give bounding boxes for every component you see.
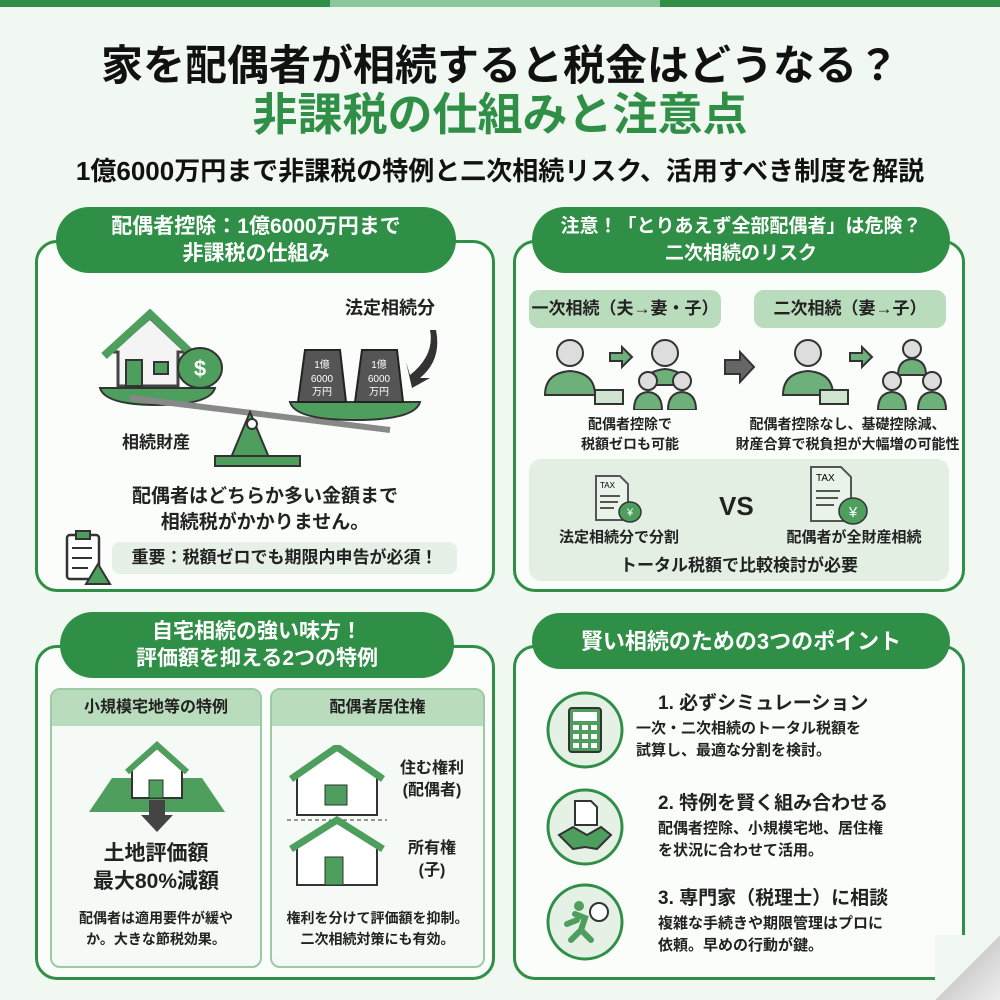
text: VS: VS bbox=[719, 491, 754, 521]
label: 相続財産: 相続財産 bbox=[122, 433, 190, 452]
icon: balance scale: 万円 bbox=[312, 387, 332, 398]
icon: handshake bbox=[546, 788, 624, 866]
label: first inheritance bbox=[529, 290, 721, 328]
icon: balance scale: 6000 bbox=[311, 374, 334, 385]
point 3: 依頼。早めの行動が鍵。 bbox=[658, 937, 823, 954]
text: note bbox=[79, 910, 233, 947]
icon: tax doc large: ¥ bbox=[848, 504, 858, 521]
subpanel header bbox=[52, 690, 260, 726]
text: first note: 配偶者控除で bbox=[588, 416, 672, 432]
panel3 header: 評価額を抑える2つの特例 bbox=[136, 647, 378, 670]
icon: balance scale: 6000 bbox=[368, 374, 391, 385]
label: first inheritance: 一次相続（夫→妻・子） bbox=[532, 299, 718, 318]
page curl bbox=[935, 935, 1000, 1000]
panel3 header bbox=[60, 612, 454, 678]
label: ownership bbox=[408, 839, 456, 879]
icon: tax doc large: TAX bbox=[816, 473, 835, 484]
icon column circles bbox=[546, 692, 624, 960]
label: 法定相続分: 法定相続分 bbox=[345, 298, 435, 318]
point 1: 一次・二次相続のトータル税額を bbox=[636, 720, 861, 737]
panel1 header: 非課税の仕組み bbox=[182, 242, 330, 265]
icon: balance scale bbox=[98, 308, 438, 467]
text: panel1 explanation: 配偶者はどちらか多い金額まで bbox=[132, 486, 398, 507]
panel: spouse deduction bbox=[35, 240, 495, 592]
text: compare total: トータル税額で比較検討が必要 bbox=[620, 556, 858, 575]
text: note: か。大きな節税効果。 bbox=[86, 931, 226, 947]
text: panel1 explanation bbox=[132, 486, 398, 533]
panel: second inheritance risk bbox=[513, 240, 965, 592]
subheading: 1億6000万円まで非課税の特例と二次相続リスク、活用すべき制度を解説 bbox=[76, 156, 924, 186]
panel4 header bbox=[532, 613, 950, 669]
point 2 bbox=[658, 792, 888, 859]
icon: split house bbox=[287, 745, 387, 886]
icon: tax doc large bbox=[810, 466, 868, 525]
icon: tax doc small: TAX bbox=[600, 481, 616, 490]
text: note bbox=[286, 910, 468, 947]
text: note: 配偶者は適用要件が緩や bbox=[79, 910, 233, 926]
text: 80% reduction: 土地評価額 bbox=[104, 842, 208, 865]
title: 家を配偶者が相続すると税金はどうなる？ bbox=[101, 42, 899, 89]
subpanel: small land bbox=[50, 688, 262, 968]
panel2 header: 二次相続のリスク bbox=[665, 243, 817, 264]
panel: two special rules bbox=[35, 645, 495, 980]
label: ownership: (子) bbox=[419, 862, 445, 879]
text: panel1 explanation: 相続税がかかりません。 bbox=[161, 512, 369, 533]
panel4 header: 賢い相続のための3つのポイント bbox=[581, 628, 901, 654]
icon: people flows bbox=[544, 339, 947, 410]
text: second note: 財産合算で税負担が大幅増の可能性 bbox=[736, 436, 960, 452]
subpanel header: 小規模宅地等の特例 bbox=[84, 699, 228, 716]
label: ownership: 所有権 bbox=[408, 840, 456, 857]
point 1: 1. 必ずシミュレーション bbox=[658, 693, 868, 714]
icon: house on land bbox=[89, 741, 225, 832]
panel1 header: 配偶者控除：1億6000万円まで bbox=[111, 215, 401, 238]
point 2: 2. 特例を賢く組み合わせる bbox=[658, 793, 888, 814]
text: 80% reduction: 最大80%減額 bbox=[93, 870, 219, 893]
panel1 header bbox=[56, 207, 456, 273]
point 1 bbox=[636, 692, 868, 759]
text: first note bbox=[581, 416, 679, 452]
callout: important bbox=[112, 542, 457, 574]
icon: balance scale: 万円 bbox=[369, 387, 389, 398]
text: second note: 配偶者控除なし、基礎控除減、 bbox=[750, 416, 946, 432]
subpanel: spouse residence right bbox=[270, 688, 485, 968]
label: all to spouse: 配偶者が全財産相続 bbox=[786, 529, 922, 546]
icon: tax doc small: ¥ bbox=[626, 507, 634, 519]
subpanel header: 配偶者居住権 bbox=[329, 699, 426, 716]
label: second inheritance bbox=[754, 290, 946, 328]
text: 80% reduction bbox=[93, 842, 219, 893]
point 3: 3. 専門家（税理士）に相談 bbox=[658, 888, 888, 909]
label: legal split: 法定相続分で分割 bbox=[559, 529, 679, 546]
panel: three points bbox=[513, 645, 965, 980]
panel3 header: 自宅相続の強い味方！ bbox=[152, 620, 362, 643]
point 2: を状況に合わせて活用。 bbox=[658, 842, 823, 859]
label: right to live: (配偶者) bbox=[403, 782, 461, 799]
icon: calculator bbox=[546, 692, 624, 768]
panel2 header bbox=[532, 207, 950, 273]
icon: balance scale: $ bbox=[194, 356, 206, 381]
subtitle green: 非課税の仕組みと注意点 bbox=[252, 89, 748, 140]
point 1: 試算し、最適な分割を検討。 bbox=[636, 742, 831, 759]
label: right to live: 住む権利 bbox=[400, 760, 464, 777]
icon: clipboard warning bbox=[66, 530, 112, 585]
top stripe bbox=[0, 0, 1000, 7]
icon: balance scale: 1億 bbox=[371, 358, 387, 371]
text: first note: 税額ゼロも可能 bbox=[581, 436, 679, 452]
point 3 bbox=[658, 888, 888, 954]
text: note: 権利を分けて評価額を抑制。 bbox=[286, 910, 468, 926]
callout: important: 重要：税額ゼロでも期限内申告が必須！ bbox=[132, 548, 438, 567]
point 2: 配偶者控除、小規模宅地、居住権 bbox=[658, 820, 883, 837]
label: second inheritance: 二次相続（妻→子） bbox=[774, 299, 926, 318]
subpanel header bbox=[272, 690, 483, 726]
icon: tax doc small bbox=[595, 475, 642, 523]
label: right to live bbox=[400, 759, 464, 799]
icon: running clock bbox=[546, 884, 624, 960]
point 3: 複雑な手続きや期限管理はプロに bbox=[658, 915, 883, 932]
panel2 header: 注意！「とりあえず全部配偶者」は危険？ bbox=[560, 216, 922, 237]
icon: balance scale: 1億 bbox=[314, 358, 330, 371]
comparison box bbox=[529, 459, 949, 581]
text: note: 二次相続対策にも有効。 bbox=[300, 931, 454, 947]
text: second note bbox=[736, 416, 960, 452]
